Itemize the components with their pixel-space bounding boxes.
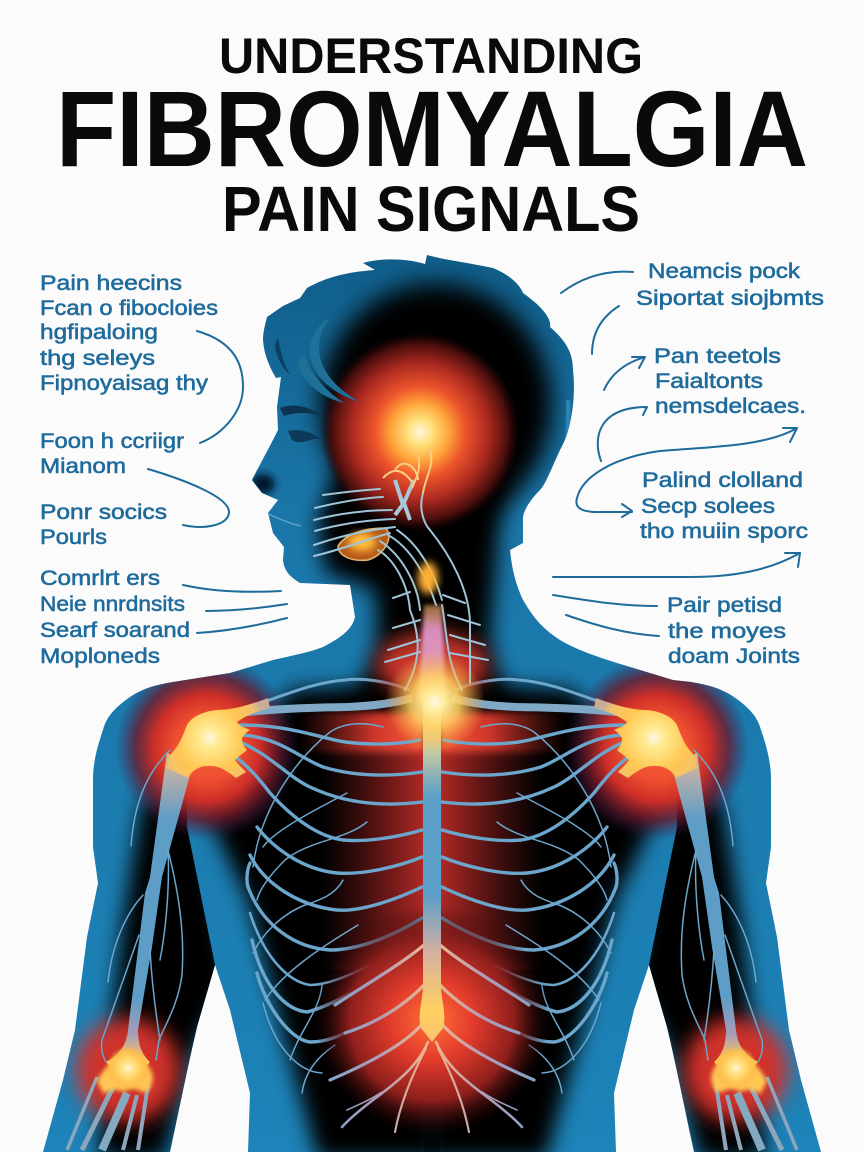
- ribs: [237, 725, 422, 1042]
- left labels: Comrlrt ers: [40, 567, 160, 590]
- right labels: nemsdelcaes.: [655, 395, 806, 418]
- mirrored half of body: [424, 656, 797, 1152]
- left labels: thg seleys: [40, 347, 155, 370]
- wrist red glow: [76, 1018, 180, 1122]
- left labels: Pain heecins: [40, 272, 182, 295]
- right callout arrows: [553, 272, 800, 636]
- left labels: Fcan o fibocloies: [40, 297, 218, 320]
- left labels: Moploneds: [40, 645, 160, 668]
- hand nerves: [67, 1077, 97, 1150]
- throat glow: [348, 533, 376, 551]
- left labels: Fipnoyaisag thy: [40, 372, 209, 395]
- thin cross nerves: [253, 724, 383, 1093]
- right labels: doam Joints: [668, 645, 800, 668]
- arm nerve: [106, 752, 190, 1085]
- dark interior: torso and arms, mirrored: [67, 656, 440, 1152]
- throat gland: [338, 528, 389, 560]
- lower left nerve branches: [330, 945, 428, 1132]
- right labels: Neamcis pock: [648, 260, 801, 283]
- spine: [420, 695, 444, 1042]
- title: [56, 28, 808, 245]
- right labels: [636, 260, 824, 668]
- hair strands: [275, 318, 570, 440]
- title: PAIN SIGNALS: [222, 173, 640, 245]
- left labels: Ponr socics: [40, 501, 167, 524]
- left labels: Foon h ccriigr: [40, 430, 184, 453]
- upper spine joint glow: [385, 652, 485, 752]
- right labels: Pan teetols: [654, 345, 781, 368]
- left callout lines: [148, 331, 287, 633]
- neck red glow: [377, 633, 487, 697]
- body silhouette: [43, 255, 821, 1152]
- human figure: [43, 255, 821, 1152]
- left labels: Mianom: [40, 455, 126, 478]
- hand core: [97, 1050, 153, 1094]
- right labels: Secp solees: [641, 495, 775, 518]
- left labels: Pourls: [40, 526, 107, 549]
- lower right nerve branches: [436, 945, 534, 1132]
- shoulder yellow blob: [167, 698, 270, 778]
- left labels: Searf soarand: [40, 619, 190, 642]
- title: UNDERSTANDING: [219, 28, 643, 84]
- right labels: Palind clolland: [642, 469, 803, 492]
- right labels: Faialtonts: [655, 370, 763, 393]
- right labels: Siportat siojbmts: [636, 287, 824, 310]
- right labels: the moyes: [668, 620, 786, 643]
- shoulder red halo: [115, 656, 299, 840]
- head pain glow: [320, 332, 520, 532]
- clavicle nerves: [232, 698, 412, 714]
- neck nerves: [314, 450, 488, 700]
- title: FIBROMYALGIA: [56, 68, 808, 189]
- face details: [251, 406, 322, 526]
- left labels: [40, 272, 218, 668]
- left labels: hgfipaloing: [40, 321, 158, 344]
- dark interior: head and neck: [318, 283, 552, 720]
- left labels: Neie nnrdnsits: [40, 593, 185, 616]
- right labels: Pair petisd: [667, 594, 782, 617]
- lower back pain glow: [314, 905, 550, 1135]
- right labels: tho muiin sporc: [640, 520, 808, 543]
- chest red glow: [322, 745, 425, 970]
